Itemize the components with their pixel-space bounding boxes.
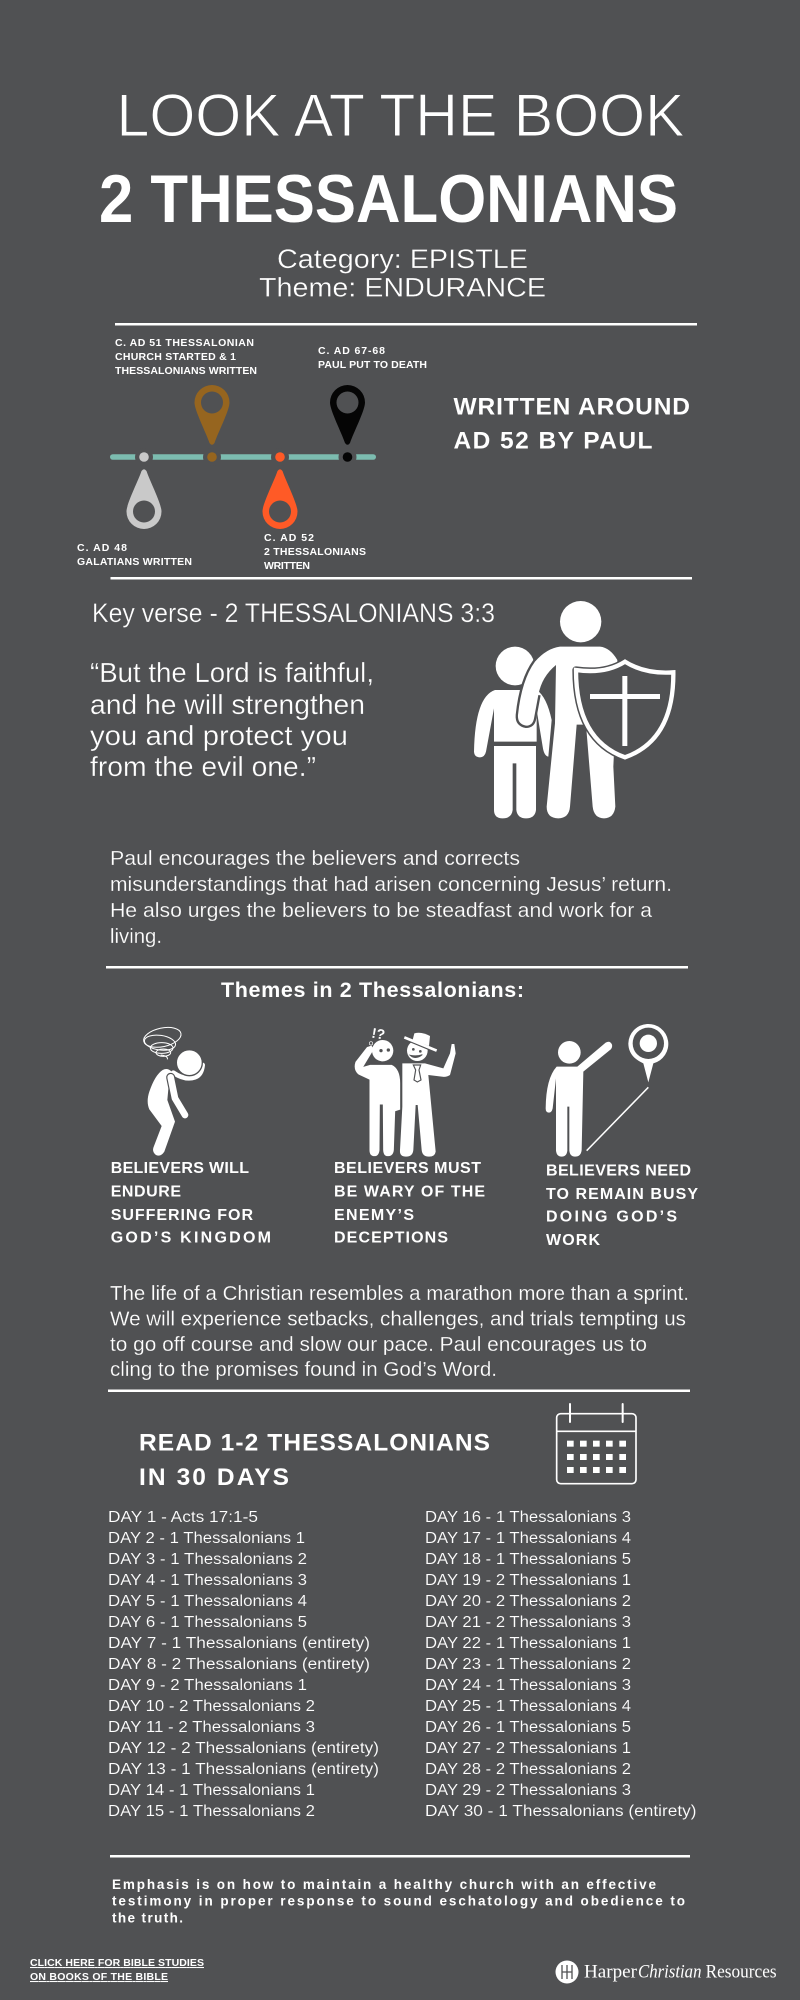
theme: Theme: ENDURANCE xyxy=(259,273,546,303)
key verse quote xyxy=(90,657,374,782)
caption: suffering: SUFFERING FOR xyxy=(111,1207,253,1224)
reading plan heading: IN 30 DAYS xyxy=(139,1464,289,1491)
reading list: days 16 to 30: DAY 21 - 2 Thessalonians 3 xyxy=(425,1614,631,1631)
caption: deceptions: BELIEVERS MUST xyxy=(334,1160,481,1177)
reading list: days 1 to 15: DAY 2 - 1 Thessalonians 1 xyxy=(108,1530,305,1547)
heading: written around xyxy=(454,393,690,455)
caption: suffering: BELIEVERS WILL xyxy=(111,1160,249,1177)
reading list: days 1 to 15: DAY 5 - 1 Thessalonians 4 xyxy=(108,1593,307,1610)
reading list: days 16 to 30: DAY 23 - 1 Thessalonians 2 xyxy=(425,1656,631,1673)
intro paragraph: misunderstandings that had arisen concerning Jesus’ return. xyxy=(110,874,672,896)
timeline dots xyxy=(135,448,356,466)
label: AD 52 xyxy=(264,532,366,572)
shield with cross xyxy=(576,662,673,757)
caption: busy: WORK xyxy=(546,1232,600,1249)
label: AD 51 xyxy=(115,337,257,377)
heading: written around: AD 52 BY PAUL xyxy=(454,428,653,455)
marathon paragraph: We will experience setbacks, challenges, and trials tempting us xyxy=(110,1309,686,1331)
caption: busy xyxy=(546,1163,698,1249)
reading list: days 1 to 15: DAY 13 - 1 Thessalonians (entirety) xyxy=(108,1761,379,1778)
reading list: days 1 to 15: DAY 7 - 1 Thessalonians (entirety) xyxy=(108,1635,370,1652)
reading list: days 16 to 30: DAY 24 - 1 Thessalonians 3 xyxy=(425,1677,631,1694)
pin: AD 52 xyxy=(262,469,298,529)
label: AD 48: C. AD 48 xyxy=(77,542,127,554)
marathon paragraph: to go off course and slow our pace. Paul encourages us to xyxy=(110,1334,647,1356)
reading list: days 1 to 15: DAY 14 - 1 Thessalonians 1 xyxy=(108,1782,315,1799)
key verse heading: Key verse - 2 THESSALONIANS 3:3 xyxy=(92,598,495,628)
adult xyxy=(518,601,617,818)
link: bible studies xyxy=(30,1957,204,1983)
reading list: days 16 to 30: DAY 20 - 2 Thessalonians 2 xyxy=(425,1593,631,1610)
reading list: days 1 to 15: DAY 12 - 2 Thessalonians (entirety) xyxy=(108,1740,379,1757)
reading list: days 1 to 15: DAY 8 - 2 Thessalonians (entirety) xyxy=(108,1656,370,1673)
emphasis statement: Emphasis is on how to maintain a healthy church with an effective xyxy=(112,1877,656,1892)
marathon paragraph xyxy=(110,1283,689,1381)
emphasis statement xyxy=(112,1877,685,1926)
link: bible studies: CLICK HERE FOR BIBLE STUDIES xyxy=(30,1957,204,1969)
icon: protector with shield and child xyxy=(474,601,673,818)
label: AD 52: 2 THESSALONIANS xyxy=(264,546,366,558)
key verse quote: you and protect you xyxy=(90,720,348,751)
marathon paragraph: The life of a Christian resembles a marathon more than a sprint. xyxy=(110,1283,689,1305)
label: AD 67-68: PAUL PUT TO DEATH xyxy=(318,359,427,371)
intro paragraph: Paul encourages the believers and corrects xyxy=(110,848,520,870)
emphasis statement: testimony in proper response to sound eschatology and obedience to xyxy=(112,1894,685,1909)
reading list: days 1 to 15: DAY 3 - 1 Thessalonians 2 xyxy=(108,1551,307,1568)
panel: themes xyxy=(111,1024,698,1249)
caption: busy: BELIEVERS NEED xyxy=(546,1163,691,1180)
label: AD 51: THESSALONIANS WRITTEN xyxy=(115,365,257,377)
icon: figure pointing to map pin xyxy=(546,1024,668,1157)
title line: look at the book: LOOK AT THE BOOK xyxy=(116,82,684,149)
reading list: days 1 to 15: DAY 10 - 2 Thessalonians 2 xyxy=(108,1698,315,1715)
icon: deceiver and believer xyxy=(354,1025,456,1157)
reading list: days 16 to 30: DAY 26 - 1 Thessalonians 5 xyxy=(425,1719,631,1736)
label: AD 51: C. AD 51 THESSALONIAN xyxy=(115,337,254,349)
reading list: days 16 to 30 xyxy=(425,1509,696,1820)
reading plan heading: READ 1-2 THESSALONIANS xyxy=(139,1430,490,1456)
reading list: days 1 to 15: DAY 15 - 1 Thessalonians 2 xyxy=(108,1803,315,1820)
reading list: days 1 to 15: DAY 9 - 2 Thessalonians 1 xyxy=(108,1677,307,1694)
reading list: days 1 to 15: DAY 4 - 1 Thessalonians 3 xyxy=(108,1572,307,1589)
pin: AD 48 xyxy=(126,469,162,529)
title xyxy=(99,82,684,303)
caption: deceptions: BE WARY OF THE xyxy=(334,1184,485,1201)
reading plan heading xyxy=(139,1430,490,1491)
caption: suffering: ENDURE xyxy=(111,1184,181,1201)
right figure xyxy=(400,1033,456,1157)
reading list: days 16 to 30: DAY 27 - 2 Thessalonians 1 xyxy=(425,1740,631,1757)
caption: suffering xyxy=(111,1160,271,1247)
category: Category: EPISTLE xyxy=(277,244,528,274)
reading list: days 16 to 30: DAY 18 - 1 Thessalonians 5 xyxy=(425,1551,631,1568)
timeline chart xyxy=(77,337,427,572)
timeline bar xyxy=(110,454,376,460)
left figure: !? xyxy=(370,1025,386,1043)
reading list: days 16 to 30: DAY 16 - 1 Thessalonians 3 xyxy=(425,1509,631,1526)
label: AD 52: C. AD 52 xyxy=(264,532,314,544)
intro paragraph: living. xyxy=(110,926,162,948)
key verse quote: “But the Lord is faithful, xyxy=(90,657,374,688)
reading list: days 16 to 30: DAY 25 - 1 Thessalonians 4 xyxy=(425,1698,631,1715)
label: AD 67-68 xyxy=(318,345,427,371)
caption: deceptions: ENEMY’S xyxy=(334,1207,414,1224)
caption: busy: DOING GOD’S xyxy=(546,1209,677,1226)
caption: deceptions: DECEPTIONS xyxy=(334,1230,448,1247)
label: AD 52: WRITTEN xyxy=(264,560,310,572)
themes heading: Themes in 2 Thessalonians: xyxy=(221,978,524,1002)
label: AD 48 xyxy=(77,542,192,568)
reading list: days 1 to 15: DAY 11 - 2 Thessalonians 3 xyxy=(108,1719,315,1736)
logo wordmark: Harper xyxy=(584,1962,638,1983)
title line: book name: 2 THESSALONIANS xyxy=(99,161,678,237)
reading list: days 1 to 15: DAY 1 - Acts 17:1-5 xyxy=(108,1509,258,1526)
logo wordmark: Resources xyxy=(706,1962,777,1983)
logo: HarperChristian Resources xyxy=(556,1960,777,1984)
child xyxy=(474,647,552,818)
marathon paragraph: cling to the promises found in God’s Word. xyxy=(110,1359,497,1381)
icon: calendar xyxy=(557,1404,636,1484)
caption: deceptions xyxy=(334,1160,485,1247)
emphasis statement: the truth. xyxy=(112,1911,183,1926)
caption: busy: TO REMAIN BUSY xyxy=(546,1186,698,1203)
reading list: days 16 to 30: DAY 22 - 1 Thessalonians 1 xyxy=(425,1635,631,1652)
logo wordmark: Christian xyxy=(638,1962,702,1983)
icon: suffering believer xyxy=(142,1024,203,1156)
logo mark xyxy=(556,1960,578,1984)
reading list: days 16 to 30: DAY 30 - 1 Thessalonians (entirety) xyxy=(425,1803,696,1820)
pin: AD 51 xyxy=(194,385,230,445)
label: AD 48: GALATIANS WRITTEN xyxy=(77,556,192,568)
reading list: days 16 to 30: DAY 29 - 2 Thessalonians 3 xyxy=(425,1782,631,1799)
key verse quote: and he will strengthen xyxy=(90,689,365,720)
reading list: days 16 to 30: DAY 19 - 2 Thessalonians 1 xyxy=(425,1572,631,1589)
reading list: days 1 to 15: DAY 6 - 1 Thessalonians 5 xyxy=(108,1614,307,1631)
reading list: days 16 to 30: DAY 28 - 2 Thessalonians 2 xyxy=(425,1761,631,1778)
label: AD 51: CHURCH STARTED & 1 xyxy=(115,351,236,363)
reading list: days 1 to 15 xyxy=(108,1509,379,1820)
pin: AD 67-68 xyxy=(330,385,365,445)
heading: written around: WRITTEN AROUND xyxy=(454,393,690,420)
link: bible studies: ON BOOKS OF THE BIBLE xyxy=(30,1971,168,1983)
intro paragraph xyxy=(110,848,672,948)
caption: suffering: GOD’S KINGDOM xyxy=(111,1230,271,1247)
logo wordmark xyxy=(584,1962,777,1983)
label: AD 67-68: C. AD 67-68 xyxy=(318,345,385,357)
key verse quote: from the evil one.” xyxy=(90,751,316,782)
reading list: days 16 to 30: DAY 17 - 1 Thessalonians 4 xyxy=(425,1530,631,1547)
intro paragraph: He also urges the believers to be steadfast and work for a xyxy=(110,900,653,922)
